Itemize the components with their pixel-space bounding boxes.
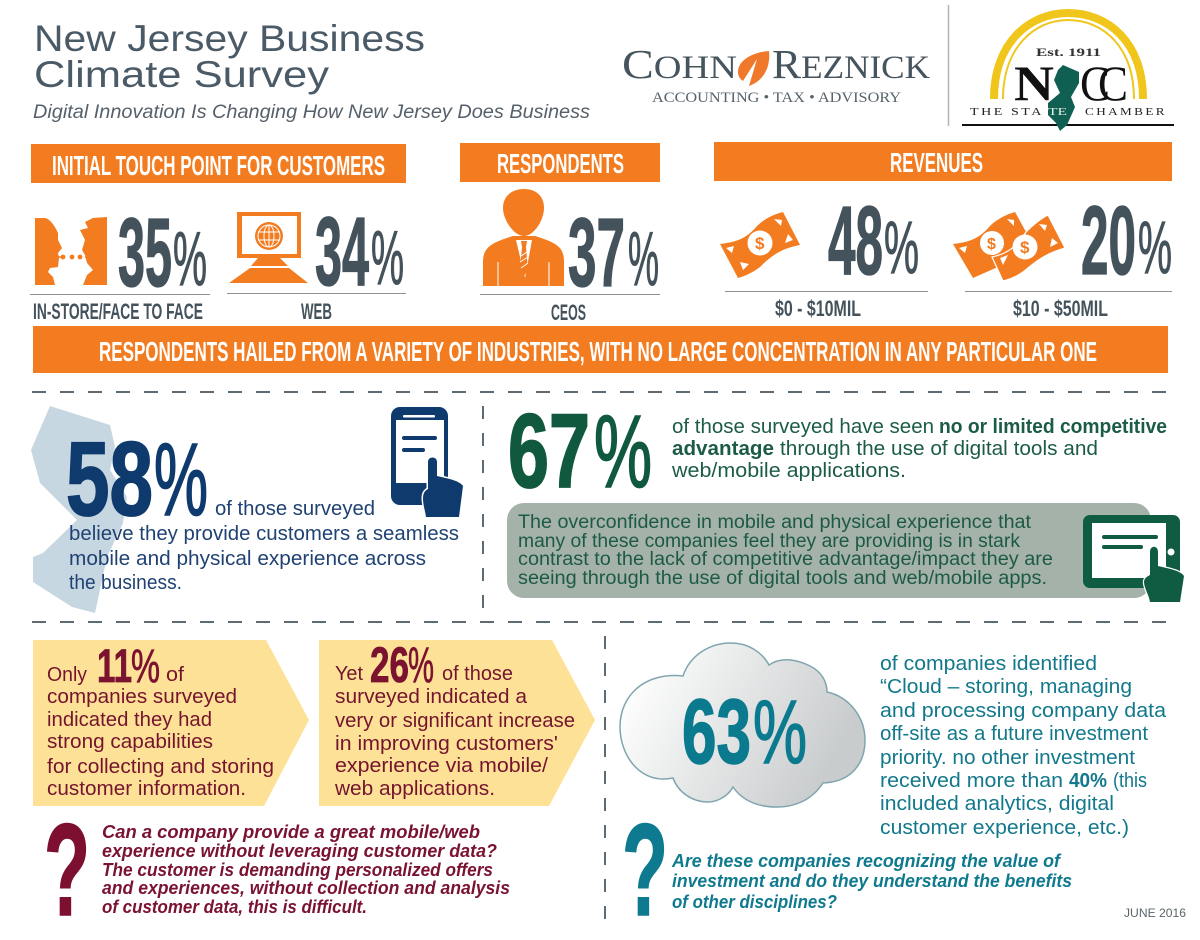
text: 26% customers' experience: Yet — [335, 663, 363, 685]
text: investment question: Are these companies recognizing the value of — [671, 851, 1062, 871]
title: Climate Survey — [34, 54, 330, 95]
text: customer data question: of customer data, this is difficult. — [102, 897, 367, 917]
text: cloud investment: (this — [1113, 770, 1147, 792]
panel: question on customer data — [44, 796, 510, 940]
icon: phone with hand — [391, 407, 463, 517]
panel: initial touch point for customers — [30, 144, 406, 324]
logo: NJ State Chamber — [962, 13, 1174, 131]
text: cloud investment: off-site as a future investment — [880, 723, 1148, 745]
text: customer data question: The customer is demanding personalized offers — [102, 860, 493, 880]
panel: 63% cloud — [620, 643, 1167, 839]
label: CEOs: CEOS — [551, 300, 586, 325]
panel: 67% competitive advantage — [507, 393, 1184, 602]
label: $10 - $50mil: $10 - $50MIL — [1013, 296, 1108, 321]
stat: 37%: 37 — [568, 198, 625, 307]
text: 11% customer information: companies surveyed — [47, 686, 237, 708]
text: cloud investment: included analytics, digital — [880, 793, 1114, 815]
text: 11% customer information: for collecting and storing — [47, 756, 274, 778]
stat: 63%: 63 — [682, 681, 751, 783]
heading: initial touch point — [31, 144, 406, 183]
title — [34, 18, 425, 95]
icon: businessman — [483, 189, 564, 286]
text: seamless experience: mobile and physical experience across — [69, 548, 426, 570]
stat: 67%: % — [594, 394, 652, 509]
icon: dollar bill: $ — [755, 234, 765, 253]
text: cloud investment: 40% — [1069, 770, 1107, 792]
heading: respondents — [460, 143, 660, 182]
callout: overconfidence — [507, 503, 1151, 598]
panel: 11% arrow — [33, 639, 309, 806]
icon: tablet with hand — [1083, 515, 1184, 602]
icon: teal question mark: ? — [622, 796, 668, 940]
callout: overconfidence: The overconfidence in mobile and physical experience that — [518, 512, 1032, 533]
text: competitive advantage: advantage — [672, 438, 774, 460]
icon: dollar bill — [720, 212, 800, 278]
label: web: WEB — [301, 299, 332, 324]
subtitle: Digital Innovation Is Changing How New Jersey Does Business — [33, 102, 591, 123]
text: cloud investment: priority. no other investment — [880, 747, 1135, 769]
text: 26% customers' experience: % — [408, 637, 434, 693]
banner: variety of industries — [33, 326, 1168, 373]
icon: stacked dollar bills — [953, 212, 1065, 281]
text: seamless experience — [69, 498, 459, 594]
panel: 26% arrow — [319, 637, 595, 806]
text: competitive advantage: no or limited competitive — [939, 416, 1167, 438]
text: 26% customers' experience: experience via mobile/ — [335, 755, 548, 777]
stat: 20%: 20 — [1081, 186, 1136, 295]
text: 26% customers' experience: in improving customers' — [335, 733, 558, 755]
text: 11% customer information: % — [131, 639, 160, 692]
icon: cloud — [620, 643, 865, 807]
label: $0 - $10mil: $0 - $10MIL — [775, 296, 861, 321]
panel: respondents — [460, 143, 660, 325]
stat: 58%: % — [154, 422, 208, 537]
logo: NJ State Chamber: N — [1014, 55, 1054, 111]
stat: 34%: 34 — [315, 197, 369, 306]
text: customer data question: experience without leveraging customer data? — [102, 841, 497, 861]
logo: CohnReznick: COHN — [622, 41, 737, 87]
text: 26% customers' experience: web applications. — [334, 778, 495, 800]
text: competitive advantage: of those surveyed have seen — [672, 416, 934, 438]
text: customer data question: Can a company provide a great mobile/web — [102, 822, 480, 842]
callout: overconfidence: many of these companies feel they are providing is in stark — [518, 531, 1020, 552]
stat: 48%: % — [884, 206, 919, 289]
text: competitive advantage: through the use of digital tools and — [780, 438, 1098, 460]
text: 26% customers' experience — [334, 637, 575, 800]
logo: NJ State Chamber: C — [1098, 55, 1128, 111]
date: JUNE 2016 — [1124, 908, 1186, 920]
text: competitive advantage: web/mobile applications. — [671, 460, 906, 482]
text: seamless experience: believe they provide customers a seamless — [69, 523, 459, 545]
logo: CohnReznick — [622, 41, 930, 106]
panel: initial touch point for customers: % — [371, 216, 404, 301]
stat: 67%: 67 — [508, 393, 590, 510]
text: 11% customer information — [47, 639, 274, 800]
panel: revenues — [714, 142, 1172, 321]
text: 26% customers' experience: surveyed indicated a — [335, 686, 528, 708]
panel: 58% seamless experience — [31, 406, 463, 613]
text: % — [628, 217, 659, 302]
heading: initial touch point: INITIAL TOUCH POINT FOR CUSTOMERS — [52, 150, 385, 181]
text: cloud investment: received more than — [880, 770, 1063, 792]
stat: 58%: 58 — [66, 421, 153, 538]
icon: maroon question mark: ? — [44, 796, 90, 940]
text: investment question — [671, 851, 1072, 912]
icon: stacked dollar bills: $ — [987, 236, 996, 253]
callout: overconfidence: seeing through the use of digital tools and web/mobile apps. — [518, 568, 1047, 589]
text: 11% customer information: indicated they had — [47, 709, 212, 731]
text: 11% customer information: 11 — [97, 639, 132, 692]
heading: respondents: RESPONDENTS — [497, 148, 624, 179]
text: 11% customer information: of — [166, 664, 184, 686]
stat: 48%: 48 — [828, 186, 883, 295]
heading: revenues — [714, 142, 1172, 181]
icon: stacked dollar bills: $ — [1020, 238, 1030, 257]
stat: 63%: % — [753, 683, 807, 783]
text: seamless experience: the business. — [69, 572, 182, 594]
text: 11% customer information: customer information. — [47, 778, 246, 800]
heading: revenues: REVENUES — [890, 147, 983, 178]
map: New Jersey silhouette — [31, 406, 127, 613]
stat: 35%: 35 — [118, 198, 172, 307]
text: cloud investment: and processing company data — [880, 700, 1167, 722]
text: customer data question: and experiences, without collection and analysis — [102, 878, 510, 898]
callout: overconfidence: contrast to the lack of competitive advantage/impact they are — [518, 549, 1053, 570]
stat: 35%: % — [173, 217, 207, 302]
text: investment question: investment and do they understand the benefits — [672, 871, 1072, 891]
label: in-store: IN-STORE/FACE TO FACE — [33, 299, 203, 324]
text: 26% customers' experience: of those — [442, 663, 513, 685]
logo: CohnReznick: REZNICK — [772, 41, 930, 87]
icon: computer with globe — [229, 212, 308, 283]
text: cloud investment: “Cloud – storing, managing — [880, 676, 1132, 698]
text: seamless experience: of those surveyed — [215, 498, 375, 520]
text: cloud investment: customer experience, etc.) — [880, 817, 1129, 839]
logo: NJ State Chamber: Est. 1911 — [1036, 45, 1101, 59]
text: 11% customer information: Only — [47, 664, 87, 686]
text: investment question: of other disciplines? — [672, 892, 837, 912]
text: 26% customers' experience: very or significant increase — [335, 710, 575, 732]
logo: CohnReznick: ACCOUNTING • TAX • ADVISORY — [652, 90, 901, 106]
logo: NJ State Chamber: CHAMBER — [1085, 106, 1167, 118]
text: customer data question — [102, 822, 510, 917]
panel: question on investment — [622, 796, 1072, 940]
logo: NJ State Chamber: TE — [1048, 106, 1067, 118]
logo: NJ State Chamber: C — [1080, 55, 1110, 111]
title: New Jersey Business — [34, 18, 425, 59]
icon: two faces — [35, 217, 107, 285]
text: competitive advantage — [671, 416, 1167, 482]
text: cloud investment: of companies identified — [880, 653, 1097, 675]
logo: NJ State Chamber: THE STA — [970, 106, 1044, 118]
text: 26% customers' experience: 26 — [370, 637, 409, 693]
text: 11% customer information: strong capabilities — [47, 731, 213, 753]
text: cloud investment — [880, 653, 1167, 839]
